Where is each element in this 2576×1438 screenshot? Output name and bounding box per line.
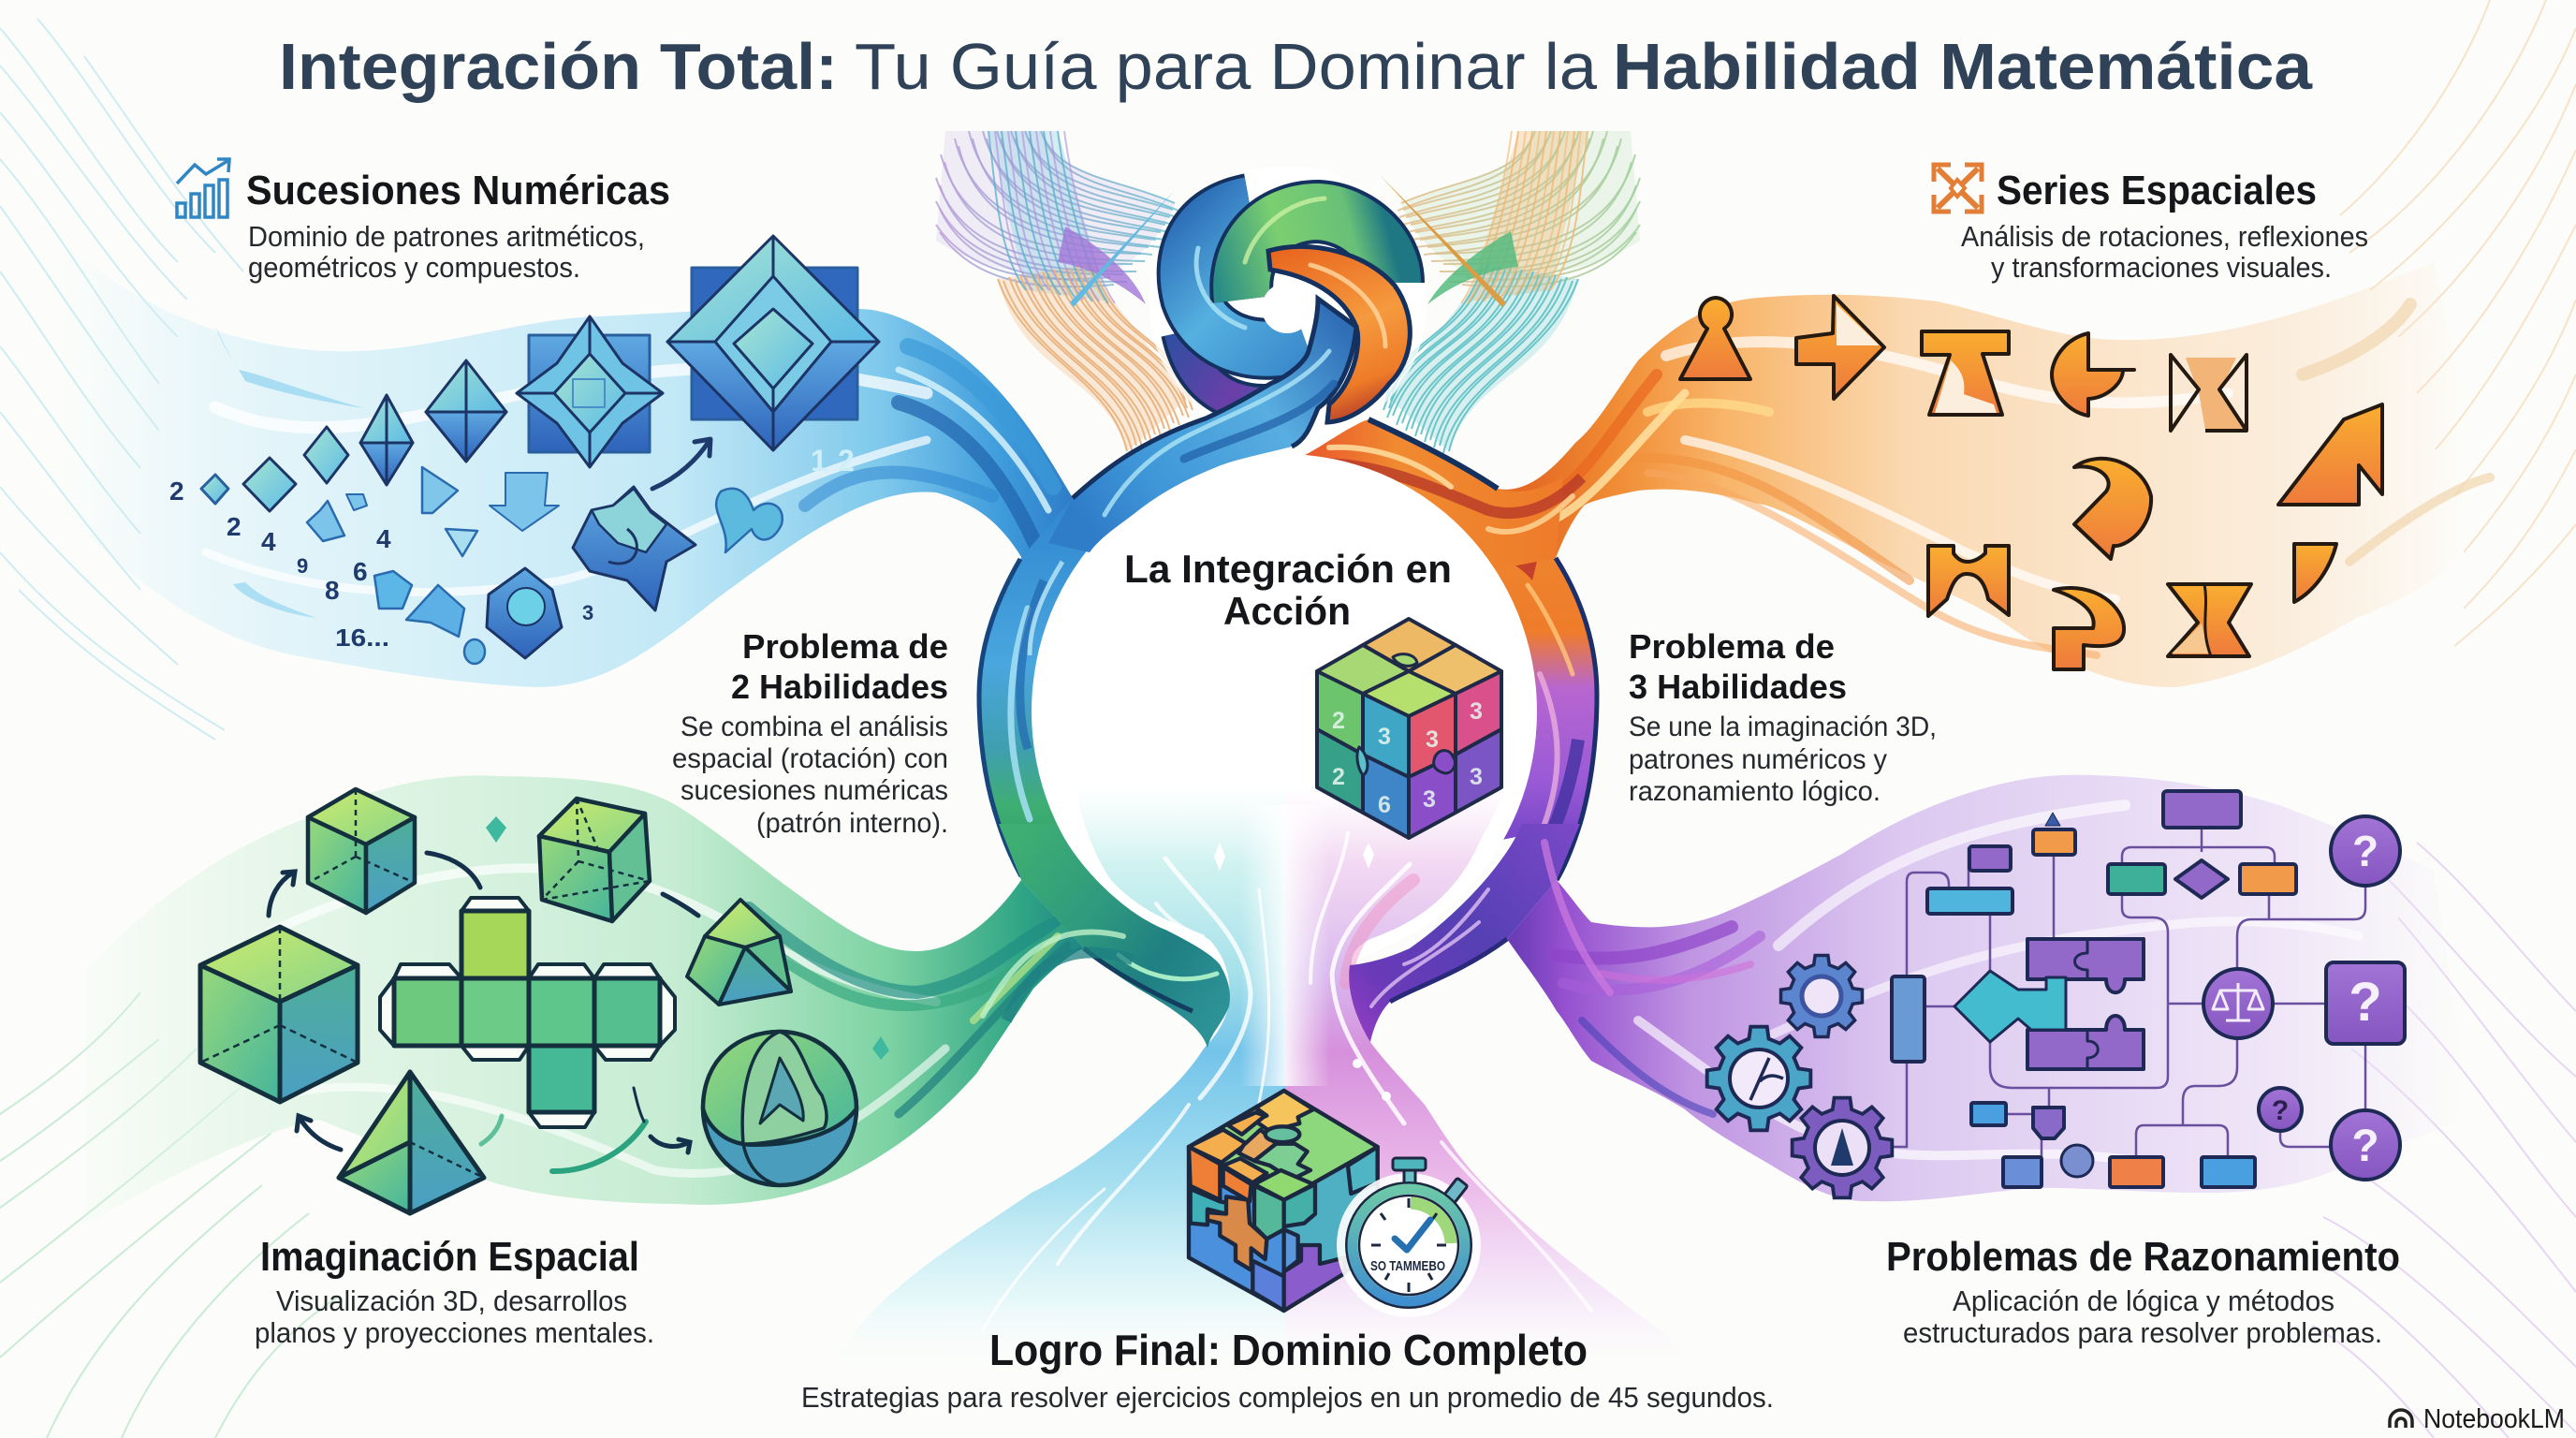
panel: flowchart nodes: ?	[2352, 827, 2378, 875]
title: Habilidad Matemática	[1613, 30, 2313, 103]
heading: Problema de 3 Habilidades: 3 Habilidades	[1629, 668, 1847, 706]
heading: Problema de 3 Habilidades: razonamiento lógico.	[1629, 776, 1881, 807]
heading: Problema de 3 Habilidades: patrones numéricos y	[1629, 744, 1887, 775]
heading: Series Espaciales	[1961, 168, 2368, 284]
arrows: solids cycle	[269, 816, 889, 1171]
centre seam glow	[1240, 805, 1330, 1086]
heading: Problema de 2 Habilidades	[672, 627, 948, 839]
panel: purple ribbon	[1507, 775, 2471, 1201]
labels: sequence numbers: 16...	[335, 624, 389, 652]
heading: Imaginación Espacial: Imaginación Espacial	[260, 1234, 639, 1280]
panel: flowchart nodes: ?	[2351, 1122, 2379, 1171]
heading: Problemas de Razonamiento	[1886, 1234, 2400, 1349]
heading: Logro Final	[801, 1326, 1774, 1414]
heading: Problemas de Razonamiento: Aplicación de lógica y métodos	[1953, 1284, 2334, 1317]
heading: Problemas de Razonamiento: estructurados para resolver problemas.	[1903, 1316, 2382, 1349]
labels: sequence numbers	[169, 444, 855, 652]
top right arc orange strand	[1292, 419, 1582, 571]
teal band joining the stream	[983, 824, 1230, 1049]
icon: stopwatch	[1337, 1158, 1481, 1317]
panel: 3D solids and net	[200, 789, 856, 1213]
icon: stopwatch: SO TAMMEBO	[1370, 1258, 1445, 1274]
heading: Imaginación Espacial: Visualización 3D, desarrollos	[276, 1284, 627, 1317]
heading: Series Espaciales: Series Espaciales	[1997, 168, 2317, 213]
heading: Problema de 3 Habilidades: Problema de	[1629, 627, 1835, 666]
labels: sequence numbers: 2	[169, 477, 184, 506]
ring: left arc blue to green	[979, 498, 1170, 876]
heading: Logro Final: Estrategias para resolver ejercicios complejos en un promedio de 45 segundos.	[801, 1381, 1774, 1414]
icon: puzzle cube: 2	[1332, 764, 1345, 790]
labels: sequence numbers: 4	[261, 527, 276, 556]
icon: gears	[1707, 956, 1892, 1197]
logo: NotebookLM: NotebookLM	[2423, 1404, 2565, 1434]
heading: La Integración en Acción: Acción	[1223, 589, 1351, 633]
heading: La Integración en Acción	[1124, 547, 1452, 633]
labels: sequence numbers: 4	[376, 524, 391, 553]
heading: Problema de 3 Habilidades: Se une la imaginación 3D,	[1629, 712, 1937, 742]
icon: crossed arrows	[1934, 165, 1982, 212]
ring: right arc orange to purple	[1404, 534, 1597, 880]
panel: flowchart nodes	[1892, 791, 2405, 1187]
icon: puzzle cube: 2	[1332, 708, 1345, 734]
heading: Problema de 2 Habilidades: 2 Habilidades	[731, 668, 948, 706]
panel: green ribbon	[84, 775, 1084, 1226]
icon: puzzle cube: 3	[1470, 698, 1483, 725]
heading: Series Espaciales: Análisis de rotaciones, reflexiones	[1961, 220, 2368, 253]
heading: Sucesiones Numéricas: Dominio de patrones aritméticos,	[248, 220, 645, 253]
icon: puzzle cube: 6	[1378, 792, 1391, 818]
title	[279, 30, 2313, 103]
panel: blue ribbon	[47, 234, 1073, 687]
icon: puzzle cube: 3	[1378, 724, 1391, 750]
icon: puzzle cube: 3	[1426, 726, 1439, 753]
icon: woven knot	[1048, 166, 1427, 552]
heading: Sucesiones Numéricas: geométricos y compuestos.	[248, 251, 580, 284]
labels: sequence numbers: 3	[582, 601, 593, 624]
purple band joining the stream	[1349, 824, 1610, 1042]
panel: spatial series shapes	[1680, 296, 2382, 669]
labels: sequence numbers: 2	[227, 512, 242, 541]
heading: Problema de 3 Habilidades	[1629, 627, 1937, 807]
bottom stream: blue	[824, 786, 1285, 1376]
panel: flowchart nodes: ?	[2349, 972, 2382, 1033]
labels: sequence numbers: 6	[353, 557, 368, 586]
icon: rising bars chart	[177, 159, 229, 217]
labels: sequence numbers: 8	[325, 576, 340, 605]
heading: Series Espaciales: y transformaciones visuales.	[1991, 251, 2332, 284]
title: Tu Guía para Dominar la	[855, 30, 1597, 103]
arrows: top mesh fans	[936, 131, 1640, 453]
panel: numeric sequence gems	[201, 236, 879, 664]
icon: puzzle cube: 3	[1470, 764, 1483, 790]
heading: Problema de 2 Habilidades: Se combina el análisis	[681, 712, 948, 742]
title: Integración Total:	[279, 30, 838, 103]
centre circle	[1032, 454, 1537, 969]
bottom stream: pink	[1285, 786, 1713, 1376]
icon: final puzzle cube	[1189, 1091, 1378, 1311]
heading: Imaginación Espacial: planos y proyecciones mentales.	[255, 1316, 654, 1349]
heading: Problemas de Razonamiento: Problemas de Razonamiento	[1886, 1234, 2400, 1280]
labels: sequence numbers: 9	[297, 554, 308, 578]
panel: orange ribbon	[1488, 262, 2490, 687]
heading: Sucesiones Numéricas	[246, 168, 670, 284]
labels: sequence numbers: 1	[811, 444, 827, 477]
panel: flowchart links	[1886, 828, 2365, 1157]
heading: La Integración en Acción: La Integración en	[1124, 547, 1452, 591]
heading: Sucesiones Numéricas: Sucesiones Numéricas	[246, 168, 670, 213]
heading: Logro Final: Logro Final: Dominio Completo	[989, 1326, 1588, 1374]
heading: Problema de 2 Habilidades: Problema de	[742, 627, 948, 666]
heading: Imaginación Espacial	[255, 1234, 654, 1349]
arrow: growth arrow	[652, 439, 710, 489]
heading: Problema de 2 Habilidades: espacial (rotación) con	[672, 743, 948, 774]
icon: puzzle cube	[1317, 619, 1501, 838]
heading: Problema de 2 Habilidades: sucesiones numéricas	[681, 775, 948, 806]
icon: puzzle cube: 3	[1423, 786, 1436, 813]
panel: flowchart nodes: ?	[2272, 1095, 2289, 1126]
labels: sequence numbers: 2	[838, 444, 855, 477]
heading: Problema de 2 Habilidades: (patrón interno).	[756, 808, 948, 839]
